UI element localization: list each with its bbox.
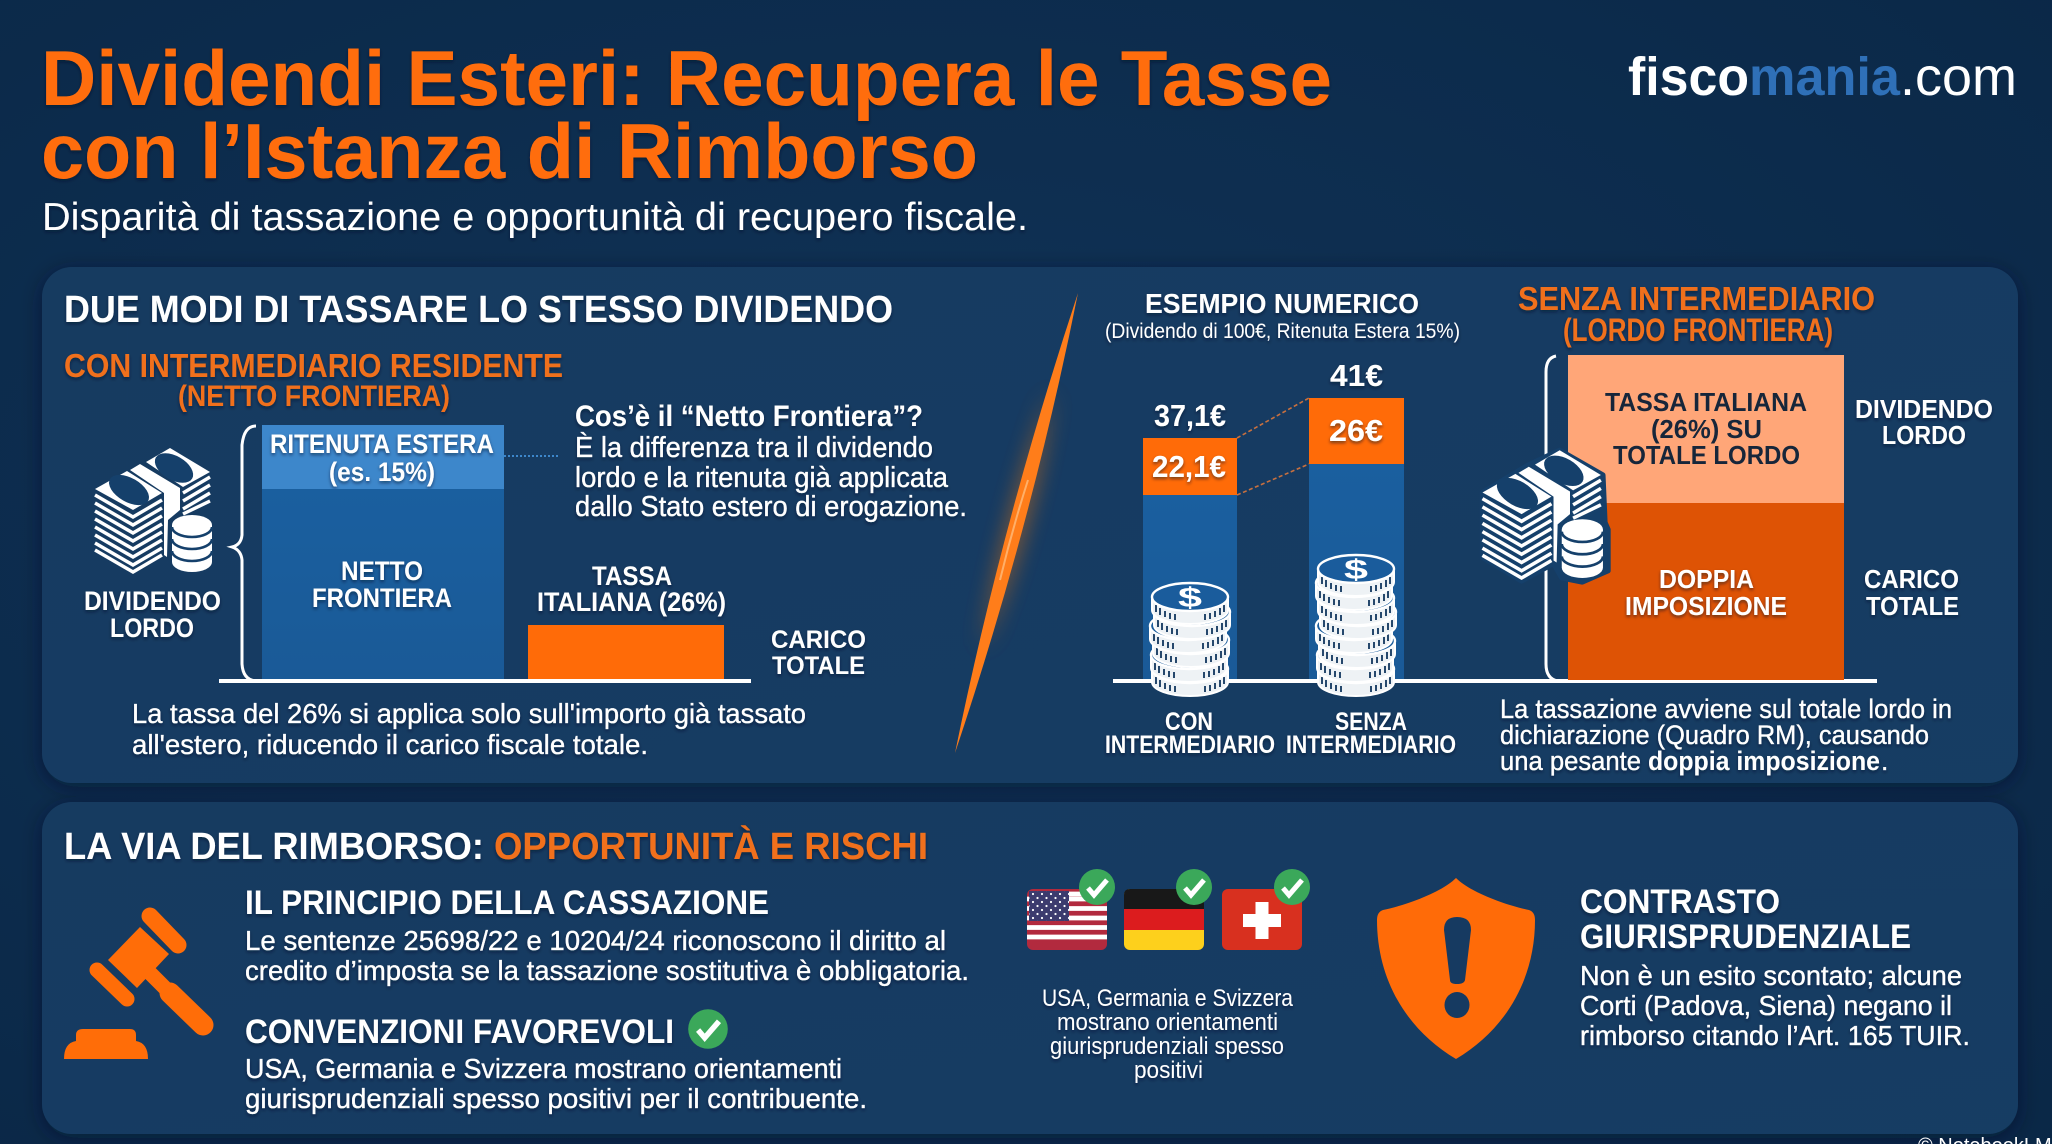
icon: coin stack con intermediario: $	[1178, 582, 1203, 613]
text block: contrasto giurisprudenziale: CONTRASTO	[1580, 883, 1780, 921]
box: tassa italiana su totale lordo: TOTALE LORDO	[1613, 440, 1800, 470]
flag: USA	[1027, 889, 1107, 950]
heading	[64, 824, 928, 868]
text block: doppia imposizione: La tassazione avviene sul totale lordo in	[1500, 694, 1952, 724]
text block: convenzioni favorevoli: giurisprudenziali spesso positivi per il contribuente.	[245, 1083, 867, 1114]
subheading: senza intermediario: (LORDO FRONTIERA)	[1563, 312, 1833, 348]
bar: ritenuta estera: (es. 15%)	[329, 457, 435, 487]
box: tassa italiana su totale lordo: TASSA ITALIANA	[1605, 387, 1807, 417]
subheading: con intermediario residente: CON INTERMEDIARIO RESIDENTE	[64, 347, 563, 384]
text block: doppia imposizione: .	[1881, 746, 1888, 776]
text block: cos'è il netto frontiera: lordo e la ritenuta già applicata	[575, 462, 949, 494]
label: senza intermediario: SENZA	[1335, 708, 1407, 736]
icon: banknotes and coins right	[1482, 449, 1608, 582]
text block: contrasto giurisprudenziale: Non è un esito scontato; alcune	[1580, 960, 1962, 991]
bar: ritenuta estera	[262, 425, 504, 489]
icon: coin stack senza intermediario	[1316, 554, 1396, 696]
heading: esempio numerico	[1105, 288, 1460, 343]
bar: ritenuta estera: RITENUTA ESTERA	[270, 429, 494, 459]
flag: Svizzera	[1222, 889, 1302, 950]
label: carico totale right	[1864, 564, 1959, 621]
panel background	[42, 802, 2018, 1134]
caption under flags: positivi	[1134, 1057, 1203, 1084]
text block: il principio della cassazione: IL PRINCIPIO DELLA CASSAZIONE	[245, 884, 769, 922]
text block: doppia imposizione: una pesante	[1500, 746, 1641, 776]
text block: cos'è il netto frontiera	[575, 400, 967, 523]
text block: convenzioni favorevoli	[245, 1013, 867, 1114]
label: dividendo lordo	[84, 586, 221, 643]
label: dividendo lordo right: DIVIDENDO	[1855, 394, 1993, 424]
icon: warning shield	[1377, 878, 1535, 1059]
subheading: senza intermediario	[1518, 280, 1875, 348]
label: carico totale: CARICO	[771, 626, 866, 654]
heading: esempio numerico: (Dividendo di 100€, Ritenuta Estera 15%)	[1105, 320, 1460, 343]
bar: netto frontiera: FRONTIERA	[312, 583, 452, 613]
brace	[232, 426, 256, 681]
label: carico totale: TOTALE	[772, 652, 865, 680]
label: dividendo lordo: LORDO	[110, 613, 194, 643]
panel: la via del rimborso	[42, 802, 2018, 1134]
logo: fiscomania.com: .com	[1900, 47, 2017, 107]
text block: doppia imposizione: doppia imposizione	[1648, 746, 1880, 776]
bar: senza intermediario 41€: 26€	[1329, 413, 1383, 448]
bar: senza intermediario 41€	[1309, 358, 1404, 680]
logo: fiscomania.com	[1628, 47, 2017, 107]
text block: contrasto giurisprudenziale: rimborso citando l’Art. 165 TUIR.	[1580, 1020, 1970, 1051]
bar: con intermediario 37,1€: 37,1€	[1154, 398, 1226, 433]
title	[41, 34, 1332, 195]
panel background	[42, 267, 2018, 783]
box: doppia imposizione: IMPOSIZIONE	[1625, 591, 1787, 621]
bar: netto frontiera: NETTO	[341, 556, 423, 586]
text block: cos'è il netto frontiera: È la differenza tra il dividendo	[575, 431, 933, 464]
axis right	[1113, 679, 1877, 683]
text block: il principio della cassazione: credito d’imposta se la tassazione sostitutiva è obbligatoria.	[245, 955, 969, 986]
label: senza intermediario	[1286, 708, 1456, 759]
label: dividendo lordo right	[1855, 394, 1993, 450]
bar: con intermediario 37,1€: 22,1€	[1152, 449, 1226, 484]
subheading: senza intermediario: SENZA INTERMEDIARIO	[1518, 280, 1875, 317]
text block: il principio della cassazione	[245, 884, 969, 986]
heading: esempio numerico: ESEMPIO NUMERICO	[1145, 288, 1419, 319]
bar: con intermediario 37,1€	[1143, 398, 1237, 680]
box: doppia imposizione	[1568, 503, 1844, 680]
bar: tassa italiana: ITALIANA (26%)	[537, 587, 726, 617]
box: tassa italiana su totale lordo: (26%) SU	[1651, 414, 1762, 444]
text block: spiegazione 26%: La tassa del 26% si applica solo sull'importo già tassato	[132, 698, 806, 729]
text block: convenzioni favorevoli: USA, Germania e Svizzera mostrano orientamenti	[245, 1053, 842, 1084]
label: con intermediario	[1105, 708, 1275, 759]
icon: banknotes and coins left	[95, 447, 212, 572]
caption under flags: mostrano orientamenti	[1057, 1009, 1278, 1036]
caption under flags	[1042, 985, 1294, 1084]
axis left	[219, 679, 751, 683]
logo: fiscomania.com: fisco	[1628, 47, 1749, 107]
text block: doppia imposizione: dichiarazione (Quadro RM), causando	[1500, 720, 1929, 750]
label: dividendo lordo right: LORDO	[1882, 420, 1966, 450]
caption under flags: USA, Germania e Svizzera	[1042, 985, 1294, 1012]
label: carico totale right: CARICO	[1864, 564, 1959, 594]
title: Dividendi Esteri: Recupera le Tasse	[41, 34, 1332, 122]
label: carico totale	[771, 626, 866, 680]
text block: contrasto giurisprudenziale: Corti (Padova, Siena) negano il	[1580, 990, 1952, 1021]
subheading: con intermediario residente: (NETTO FRONTIERA)	[178, 380, 450, 413]
label: con intermediario: INTERMEDIARIO	[1105, 731, 1275, 759]
text block: convenzioni favorevoli: CONVENZIONI FAVOREVOLI	[245, 1013, 674, 1051]
text block: contrasto giurisprudenziale	[1580, 883, 1970, 1051]
icon: coin stack senza intermediario: $	[1344, 554, 1369, 585]
orange divider slash	[955, 293, 1078, 753]
subtitle: Disparità di tassazione e opportunità di recupero fiscale.	[42, 196, 1028, 239]
label: dividendo lordo: DIVIDENDO	[84, 586, 221, 616]
icons: checks on flags	[1079, 869, 1310, 905]
bar: senza intermediario 41€: 41€	[1330, 358, 1383, 393]
bracket right	[1546, 356, 1558, 681]
label: senza intermediario: INTERMEDIARIO	[1286, 731, 1456, 759]
box: tassa italiana su totale lordo	[1568, 355, 1844, 503]
caption under flags: giurisprudenziali spesso	[1050, 1033, 1284, 1060]
panel: due modi di tassare	[42, 267, 2018, 783]
text block: il principio della cassazione: Le sentenze 25698/22 e 10204/24 riconoscono il diritto al	[245, 925, 946, 956]
icon: green check	[688, 1009, 728, 1049]
text block: contrasto giurisprudenziale: GIURISPRUDENZIALE	[1580, 918, 1911, 956]
subheading: con intermediario residente	[64, 347, 563, 413]
text block: spiegazione 26%: all'estero, riducendo il carico fiscale totale.	[132, 729, 648, 760]
bar: tassa italiana: TASSA	[592, 561, 672, 591]
bar: netto frontiera	[262, 489, 504, 680]
heading: OPPORTUNITÀ E RISCHI	[494, 824, 928, 868]
bar: tassa italiana	[528, 561, 726, 680]
dashed connectors	[1237, 398, 1309, 495]
box: doppia imposizione: DOPPIA	[1659, 564, 1754, 594]
connector dotted line	[504, 455, 560, 457]
icon: coin stack con intermediario	[1150, 582, 1230, 696]
title: con l’Istanza di Rimborso	[41, 107, 978, 195]
label: con intermediario: CON	[1165, 708, 1213, 736]
flag: Germania	[1124, 889, 1204, 950]
label: carico totale right: TOTALE	[1866, 591, 1959, 621]
heading: LA VIA DEL RIMBORSO:	[64, 826, 484, 868]
text block: cos'è il netto frontiera: Cos’è il “Netto Frontiera”?	[575, 400, 923, 433]
heading: DUE MODI DI TASSARE LO STESSO DIVIDENDO	[64, 289, 893, 331]
text block: doppia imposizione	[1500, 694, 1952, 776]
text block: cos'è il netto frontiera: dallo Stato estero di erogazione.	[575, 491, 967, 523]
icon: gavel	[64, 916, 203, 1059]
logo: fiscomania.com: mania	[1749, 47, 1901, 107]
text block: spiegazione 26%	[132, 698, 806, 760]
